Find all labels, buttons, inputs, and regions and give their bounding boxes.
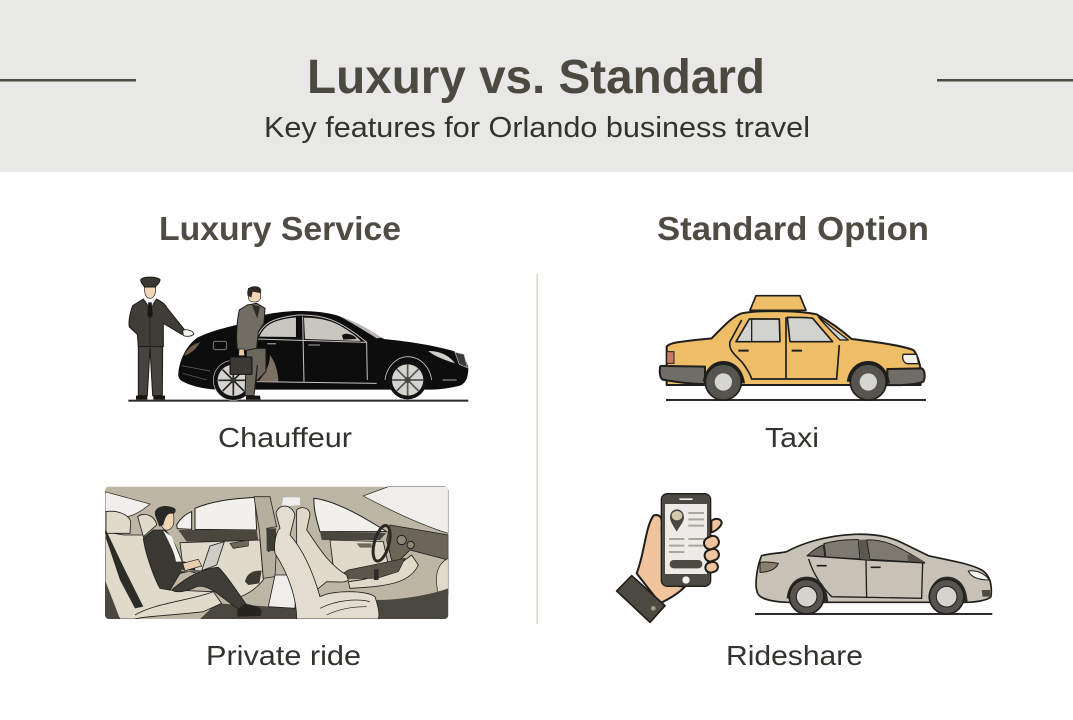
fingers — [702, 519, 722, 574]
windshield — [340, 317, 382, 338]
title: Luxury vs. Standard — [307, 51, 765, 104]
door panels — [178, 530, 258, 542]
column divider — [536, 274, 538, 624]
rear window — [259, 317, 296, 337]
cuff — [617, 576, 665, 622]
front wheel — [385, 357, 432, 399]
taillight — [184, 342, 200, 356]
windows — [736, 319, 780, 342]
headlight — [903, 354, 919, 364]
front seats — [297, 508, 348, 590]
ground line — [128, 400, 468, 402]
door handles and trim — [267, 344, 457, 380]
taillight — [667, 352, 674, 363]
header band — [0, 0, 1073, 172]
icon: hand holding phone and beige sedan — [617, 494, 992, 622]
taxi body — [667, 311, 921, 385]
seated passenger — [143, 506, 262, 617]
phone — [661, 494, 711, 586]
icon: chauffeur and black sedan — [128, 277, 468, 402]
label: chauffeur: Chauffeur — [218, 422, 352, 453]
heading: luxury service: Luxury Service — [159, 210, 401, 247]
door lines — [730, 317, 839, 379]
open door gap — [258, 355, 278, 382]
hand — [617, 515, 685, 622]
headlight — [428, 351, 455, 363]
floor and console — [200, 603, 297, 619]
laptop — [202, 542, 224, 571]
chauffeur figure — [129, 277, 194, 400]
cabin body — [105, 487, 448, 619]
chrome lines — [257, 315, 377, 383]
windows — [105, 492, 150, 517]
B pillar — [254, 497, 277, 578]
label: taxi: Taxi — [765, 422, 819, 453]
ground line — [666, 399, 926, 401]
subtitle: Key features for Orlando business travel — [264, 112, 810, 144]
front window — [304, 318, 361, 341]
dashboard — [386, 524, 448, 561]
label: private ride: Private ride — [206, 640, 361, 671]
rear wheel — [213, 360, 253, 400]
front bumper — [887, 368, 925, 385]
heading: standard option: Standard Option — [657, 210, 929, 247]
taxi roof sign — [750, 296, 806, 310]
rear bench — [105, 532, 222, 619]
passenger with briefcase — [230, 286, 266, 400]
label: rideshare: Rideshare — [726, 640, 863, 671]
icon: yellow taxi — [660, 296, 926, 401]
black sedan — [178, 311, 468, 400]
ground line — [755, 613, 992, 615]
wheels — [703, 361, 745, 400]
icon: car interior with passenger — [105, 487, 448, 619]
mirror — [342, 334, 357, 340]
rear bumper — [660, 366, 705, 384]
beige sedan — [756, 534, 991, 614]
